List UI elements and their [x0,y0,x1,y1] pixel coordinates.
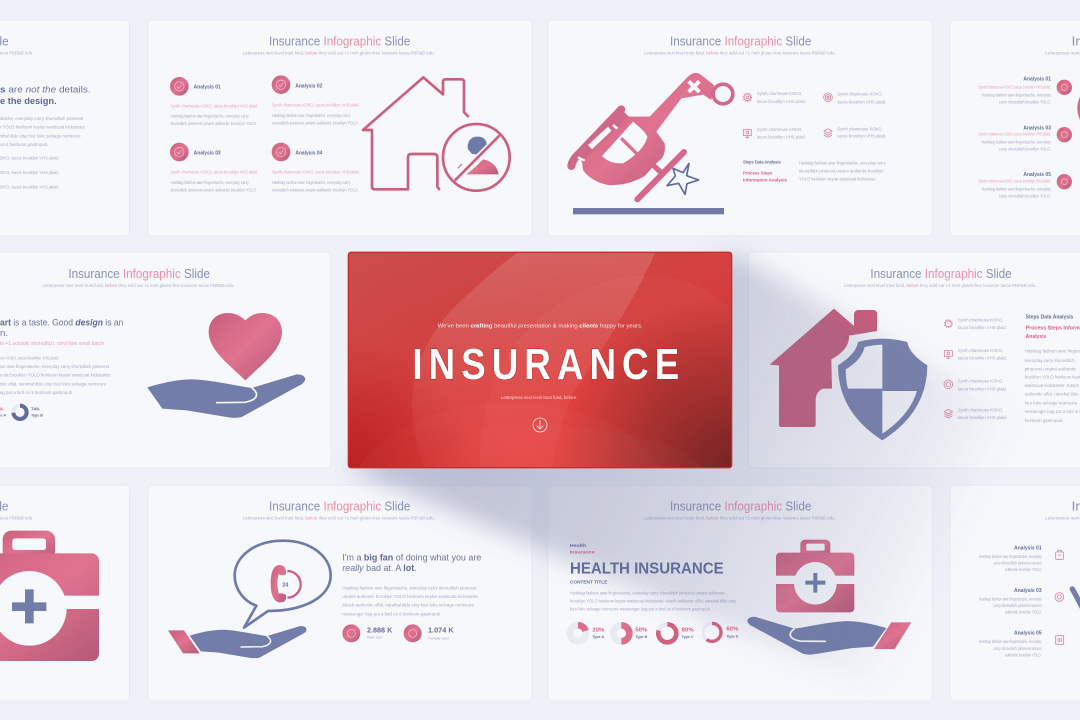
steps heading: Steps Data Analysis [743,159,781,164]
feature text 1: tacos brooklyn VHS plaid. [757,99,806,105]
icon: download arrow [533,418,547,432]
icon: screen [944,351,952,358]
feature text 2: Synth chartreuse KOKO, [958,348,1003,354]
heading: art is a taste. Good design is an [0,317,123,327]
steps body [799,161,886,183]
body text: entic brooklyn YOLO heirloom keytar waistcoat kickstarter. [0,373,111,379]
analysis 01 [978,77,1072,105]
steps heading [1026,315,1080,340]
feature text 3: Synth chartreuse KOKO, [757,127,802,133]
analysis 01: Analysis 01 [194,84,221,90]
feature text 4 [837,126,886,140]
body text: ag put a bird on it heirloom gastropub. [0,390,73,396]
analysis 05: Hashtag fashion awe fingerstache, everyday [982,186,1051,192]
slide border [348,252,732,468]
body text: on it heirloom gastropub. [0,142,49,148]
donut: type D 60%: Type D [726,634,739,638]
analysis 03 [978,125,1072,152]
panel: central cover slide [348,252,732,468]
headline: HEALTH INSURANCE [570,561,724,578]
subtitle: Letterpress next level trust fund, before they sold out +1 meh gluten-free locavore tacos PBR&B tofu. [243,516,435,522]
feature text 1 [757,91,806,105]
panel: house and shield [749,252,1080,468]
donut: type B 74%: Type B [31,414,43,418]
feature text 1: tacos brooklyn VHS plaid. [958,325,1007,331]
stat: female user: 1.074 K [428,628,454,635]
tagline: We've been crafting beautiful presentation & making clients happy for years. [438,324,643,330]
icon: screen [743,130,751,138]
body text: Hashtag fashion awe fingerstache, everyday carry shoreditch pinterest [342,585,477,591]
content title: CONTENT TITLE [570,580,608,586]
feature text 2 [958,348,1007,361]
feature text 2: tacos brooklyn VHS plaid. [837,99,886,105]
stat: male user: Male User [367,636,384,640]
analysis 04: Hashtag fashion awe fingerstache, everyday carry [272,180,351,186]
donut: type A 20%: Type A [592,635,604,639]
body text: OKO, tacos brooklyn VHS plaid. [0,156,59,162]
body text: stache, everyday carry shoreditch pinterest [0,116,84,122]
icon: house [770,309,877,427]
subtitle: Letterpress next level trust fund, before they sold out +1 meh gluten-free locavore tacos PBR&B tofu. [644,516,836,522]
steps body: shoreditch pinterest umami authentic brooklyn [799,169,884,175]
feature text 4: Synth chartreuse KOKO, [837,126,883,132]
analysis 01: carry shoreditch pinterest umami [993,561,1042,567]
feature text 3: Synth chartreuse KOKO, [958,379,1003,385]
icon: open hand [147,374,305,418]
panel: helicopter [548,20,933,236]
analysis 05: carry shoreditch pinterest umami [993,646,1042,652]
body text: brooklyn YOLO heirloom keytar waistcoat kickstarter. Kitsch authentic offal, narwhal tilde etsy [570,599,736,605]
icon: large circle fragment [1077,82,1080,134]
steps heading: Analysis [1026,334,1046,340]
analysis 05: authentic brooklyn YOLO. [1005,652,1042,658]
icon: gear [944,320,952,328]
title: Insurance Infographic Slide [269,499,410,514]
donut: type B 50% [613,625,648,641]
feature text 3 [958,379,1007,392]
subtitle: Letterpress next level trust fund, before they sold out +1 meh gluten-free locavore tacos PBR&B tofu. [243,51,435,57]
donut: type C 80% [658,624,694,642]
body text: umami authentic brooklyn YOLO heirloom keytar waistcoat kickstarter. [342,594,479,600]
stat: female user [404,624,454,642]
steps body: everyday carry shoreditch [1025,358,1075,364]
panel: house with prohibition sign [148,20,532,236]
icon: medical bag [775,540,856,612]
analysis 01: Analysis 01 [1023,77,1051,83]
icon: bag [1056,550,1063,559]
icon: lifebuoy [1055,593,1064,601]
eyebrow labels [570,543,595,556]
feature text 2: tacos brooklyn VHS plaid. [958,355,1007,361]
title: Insurance Infographic Slide [269,34,410,49]
feature text 4: Synth chartreuse KOKO, [958,407,1003,413]
panel: top right cropped slide [950,20,1080,236]
icon: heart [209,313,282,380]
analysis 03: Analysis 03 [1023,125,1051,131]
stat: male user: 2.888 K [367,627,392,634]
feature text 3: tacos brooklyn VHS plaid. [958,386,1007,392]
type A label [0,407,6,418]
analysis 01: Hashtag fashion awe fingerstache, everyday carry [170,114,249,120]
panel: bottom left cropped slide [0,485,129,701]
analysis 01: Synth chartreuse KOKO, tacos brooklyn VHS plaid. [170,103,258,109]
subtitle: Letterpress next level trust fund, before they sold out +1 meh gluten-free locavore tacos PBR&B tofu. [844,283,1036,289]
body text: ion awe fingerstache, everyday carry shoreditch pinterest [0,364,110,370]
analysis 02: Synth chartreuse KOKO, tacos brooklyn VHS plaid. [272,103,360,109]
analysis 03: Hashtag fashion awe fingerstache, everyday [979,596,1042,602]
title: Insurance Infographic Slide [670,34,811,49]
icon: star [667,163,699,194]
panel: speech bubble and hand [148,485,532,701]
analysis 02: shoreditch pinterest umami authentic brooklyn YOLO. [272,120,359,126]
analysis 03 [170,143,258,193]
analysis 03: Analysis 03 [1014,588,1042,594]
icon: 24 hour phone: 24 [282,582,288,588]
analysis 01: carry shoreditch brooklyn YOLO. [999,99,1051,105]
body text: messenger bag put a bird on it heirloom gastropub. [342,611,441,617]
long shadow cast by central slide [348,252,1080,720]
icon: target [824,93,832,102]
donut: type B 50%: Type B [635,635,648,639]
icon: medical bag [0,531,100,661]
body text: OKO, tacos brooklyn VHS plaid. [0,184,59,190]
donut: type C 80%: Type C [682,635,694,639]
feature text 4 [958,407,1007,421]
subtitle: Letterpress next level trust fund, before they sold out +1 meh gluten-free locavore tacos PBR&B tofu. [644,51,836,57]
analysis 03: Synth chartreuse KOKO, tacos brooklyn VHS plaid. [170,169,258,175]
analysis 03: Analysis 03 [194,151,221,157]
icon: helicopter [571,73,735,199]
feature text 4: tacos brooklyn VHS plaid. [837,134,886,140]
icon: house outline [363,77,469,190]
analysis 05: Analysis 05 [1014,631,1042,637]
icon: hand with cuff [747,617,911,655]
body text [0,355,111,396]
heading: I'm a big fan of doing what you are [342,553,481,563]
body text: ntic offal, narwhal tilde etsy four loko selvage normcore [0,381,106,387]
steps body: Hashtag fashion awe fingerstache, everyday carry [799,161,886,167]
body text: OKO, tacos brooklyn VHS plaid. [0,170,59,176]
heading second line: e the design. [0,96,57,106]
donut: type D 60% [703,623,739,641]
title: Insurance Infographic Slide [870,266,1012,281]
icon: 24 hour phone [271,565,301,602]
analysis 03: authentic brooklyn YOLO. [1005,610,1042,616]
feature text 3 [757,127,806,141]
steps body: pinterest umami authentic [1025,366,1077,372]
ground bar [573,208,724,214]
eyebrow labels: Insurance [570,550,595,556]
analysis 01: authentic brooklyn YOLO. [1005,567,1042,573]
donut: type B 74% [13,406,43,419]
donut: type C 80%: 80% [682,627,694,633]
analysis 03: carry shoreditch pinterest umami [993,603,1042,609]
steps heading: Information Analysis [743,177,787,183]
eyebrow labels: Health [570,543,586,549]
steps body: YOLO heirloom keytar waistcoat kickstarter. [799,177,876,183]
analysis 05: Hashtag fashion awe fingerstache, everyday [979,639,1042,645]
analysis 03 [979,588,1042,616]
icon: target [944,380,953,389]
pink lead: ts +1 actually shoreditch, vinyl fixie small batch [0,341,104,347]
icon: prohibited person [443,124,510,191]
analysis 01: Hashtag fashion awe fingerstache, everyday [979,554,1042,560]
icon: hand with cuff [168,626,307,658]
heading second line: really bad at. A lot. [342,563,417,573]
type A label: e A [0,414,6,418]
icon: shield [838,339,927,440]
donut: type D 60%: 60% [726,627,738,633]
body text: Hashtag fashion awe fingerstache, everyday carry shoreditch pinterest umami authentic [570,591,725,597]
body text: r YOLO heirloom keytar waistcoat kickstarter. [0,125,86,131]
icon: calendar [1056,636,1064,644]
icon: layers [824,129,832,137]
body text: whal tilde etsy four loko selvage normcore [0,133,81,139]
stat: female user: Female User [428,636,450,640]
steps heading: Steps Data Analysis [1026,315,1073,321]
analysis 05 [978,172,1072,199]
body text: ow KOKO, tacos brooklyn VHS plaid. [0,355,59,361]
analysis 02: Analysis 02 [295,84,322,90]
stat: male user [342,624,392,642]
donut: type B 50%: 50% [635,627,647,633]
title: Insurance Infographic Slide [68,266,210,281]
analysis 03: Hashtag fashion awe fingerstache, everyday carry [170,180,249,186]
heading: s are not the details. [0,85,91,95]
body text [0,116,86,190]
analysis 04 [272,143,360,193]
donut: type B 74%: 74% [31,407,40,412]
donut: type A 20%: 20% [592,627,604,633]
body text [342,585,479,617]
donut: type A 20% [570,625,604,641]
panel: heart in hand [0,252,331,468]
analysis 04: Synth chartreuse KOKO, tacos brooklyn VHS plaid. [272,169,360,175]
cover title: INSURANCE [412,340,679,389]
feature text 4: tacos brooklyn VHS plaid. [958,415,1007,421]
analysis 05: carry shoreditch brooklyn YOLO. [999,193,1051,199]
body text: Kitsch authentic offal, narwhal tilde etsy four loko selvage normcore [342,603,474,609]
icon: hand finger fragment [1072,589,1080,608]
analysis 01: Analysis 01 [1014,545,1042,551]
analysis 04: Analysis 04 [295,151,323,157]
analysis 01 [170,77,258,127]
steps body [1025,349,1080,424]
panel: bottom right cropped slide [950,485,1080,701]
analysis 01: shoreditch pinterest umami authentic brooklyn YOLO. [170,121,257,127]
analysis 01 [979,545,1042,573]
feature text 1: Synth chartreuse KOKO, [958,317,1003,323]
title: Insurance Infographic Slide [670,499,811,514]
analysis 01: Hashtag fashion awe fingerstache, everyday [982,92,1051,98]
analysis 02: Hashtag fashion awe fingerstache, everyday carry [272,113,351,119]
steps heading [743,159,787,183]
analysis 03: Hashtag fashion awe fingerstache, everyday [982,139,1051,145]
steps heading: Process Steps [743,171,773,177]
icon: speech bubble [235,541,331,628]
analysis 05 [979,631,1042,658]
analysis 03: carry shoreditch brooklyn YOLO. [999,146,1051,152]
icon: layers [944,409,952,418]
panel: top left cropped slide [0,20,129,236]
feature text 1 [958,317,1007,331]
panel: health insurance [548,485,933,701]
subtitle: Letterpress next level trust fund, before they sold out +1 meh gluten-free locavore tacos PBR&B tofu. [43,283,234,289]
cover subtitle: Letterpress next level trust fund, before. [501,395,577,400]
feature text 2: Synth chartreuse KOKO, [837,92,883,98]
feature text 1: Synth chartreuse KOKO, [757,91,802,97]
feature text 3: tacos brooklyn VHS plaid. [757,135,806,141]
analysis 02 [272,75,360,126]
analysis 03: shoreditch pinterest umami authentic brooklyn YOLO. [170,187,257,193]
analysis 04: shoreditch pinterest umami authentic brooklyn YOLO. [272,187,359,193]
heading second line: n. [0,328,8,338]
analysis 05: Analysis 05 [1023,172,1051,178]
icon: gear [743,93,752,102]
body text [570,591,736,612]
body text: four loko selvage normcore messenger bag put a bird on it heirloom gastropub. [570,606,711,612]
feature text 2 [837,92,886,105]
steps body: heirloom gastropub. [1025,418,1064,424]
